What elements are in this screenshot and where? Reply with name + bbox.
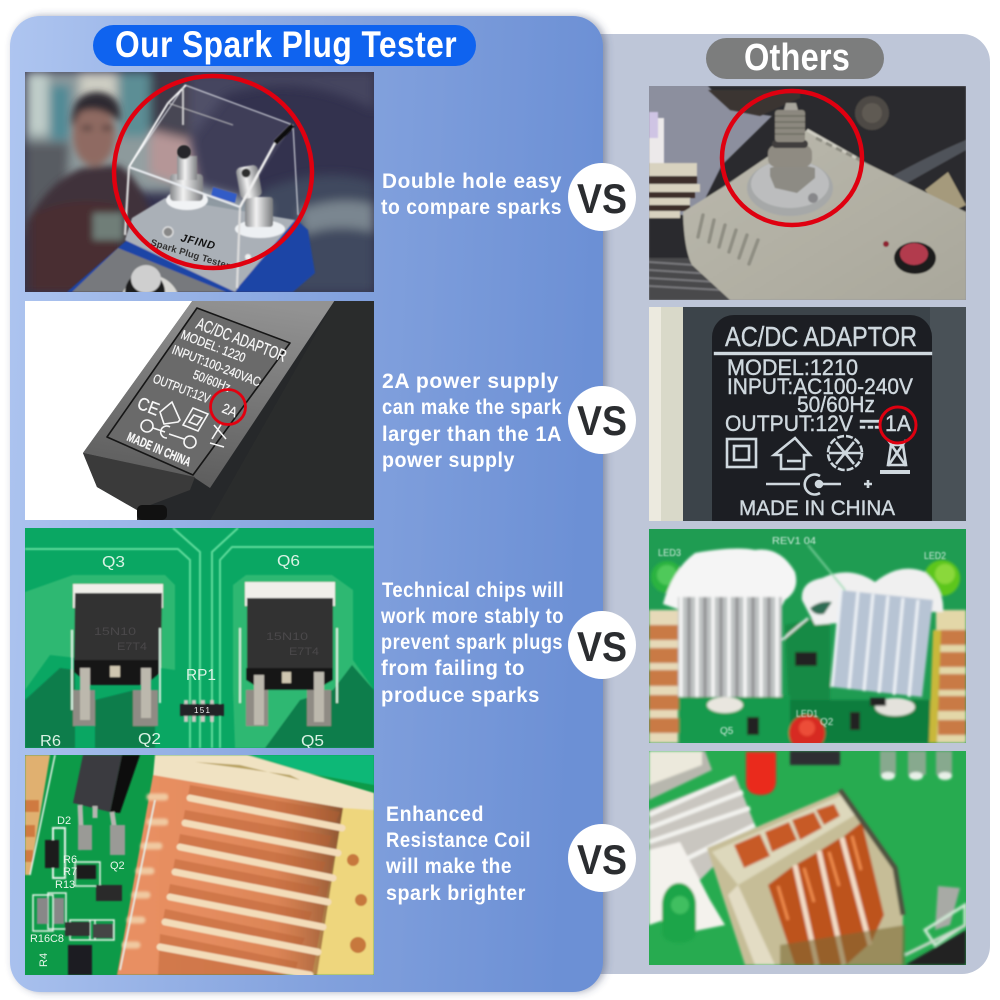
photo: 2A adapter label: AC/DC ADAPTOR [194,314,289,366]
photo: competitor adapter label 1A: AC/DC ADAPTOR [725,321,917,352]
red highlight circle [880,407,916,443]
photo: enhanced resistance coil: Q2 [110,860,125,872]
photo: competitor adapter label 1A: 1A [885,411,911,436]
caption: resistance coil [385,802,531,905]
caption: 2A power supply: can make the spark [382,395,562,419]
red highlight circle [722,91,862,225]
photo: competitor adapter label 1A: OUTPUT:12V [725,411,853,436]
photo: competitor adapter label 1A: MADE IN CHINA [739,497,895,520]
photo: competitor heat sinks: REV1 04 [772,536,816,547]
photo: competitor heat sinks: LED1 [796,709,818,720]
panel: others [560,34,990,974]
photo: 2A adapter label: OUTPUT:12V [151,371,213,406]
photo: 2A adapter label: MADE IN CHINA [125,429,194,469]
caption: resistance coil: Enhanced [386,802,484,826]
caption: double hole: Double hole easy [382,169,562,193]
photo: tester circuit board chips: Q3 [102,554,125,571]
caption: double hole [381,169,562,219]
photo: enhanced resistance coil: R4 [38,953,50,967]
photo: tester circuit board chips: Q6 [277,553,300,570]
photo: tester circuit board chips [25,528,374,750]
photo: tester circuit board chips: R6 [40,733,61,750]
caption: resistance coil: spark brighter [386,881,526,905]
caption: resistance coil: will make the [385,854,512,878]
badge: VS 3 [568,611,636,679]
caption: 2A power supply [382,369,562,472]
caption: double hole: to compare sparks [381,195,562,219]
badge: VS 4 [568,824,636,892]
photo: competitor heat sinks: LED2 [924,551,946,562]
photo: competitor heat sinks: Q2 [820,717,834,728]
caption: 2A power supply: power supply [382,448,515,472]
photo: competitor single-hole tester [649,86,966,300]
caption: technical chips [380,578,564,707]
photo: tester circuit board chips: Q5 [301,733,324,750]
icons: safety marks [141,402,226,448]
photo: enhanced resistance coil [25,755,374,975]
badge: VS 4: VS [577,836,627,883]
photo: double-hole tester with acrylic cover: Spark Plug Tester [149,237,231,272]
caption: resistance coil: Resistance Coil [386,828,531,852]
photo: 2A adapter label: 50/60Hz [191,367,233,395]
photo: tester circuit board chips: 151 [194,706,211,715]
red highlight circle [114,76,312,268]
photo: enhanced resistance coil: R7 [63,866,77,878]
icons: safety marks [727,436,910,495]
photo: double-hole tester with acrylic cover [25,72,374,292]
badge: VS 3: VS [577,623,627,670]
caption: technical chips: prevent spark plugs [381,630,563,654]
panel: our spark plug tester [10,16,603,992]
caption: 2A power supply: 2A power supply [382,369,559,393]
photo: 2A adapter label: 2A [220,400,240,420]
caption: 2A power supply: larger than the 1A [382,422,562,446]
photo: double-hole tester with acrylic cover: JFIND [179,232,216,252]
photo: competitor adapter label 1A: INPUT:AC100-240V [727,374,913,399]
photo: competitor coil [649,751,966,965]
badge: VS 2: VS [577,397,627,444]
badge: VS 1 [568,163,636,231]
photo: tester circuit board chips: E7T4 [289,646,319,658]
photo: enhanced resistance coil: R6 [63,854,77,866]
photo: 2A adapter label: INPUT:100-240VAC [170,342,263,389]
photo: enhanced resistance coil: R16C8 [30,933,64,945]
photo: competitor heat sinks: Q5 [720,726,734,737]
caption: technical chips: produce sparks [381,683,540,707]
photo: competitor heat sinks: LED3 [658,548,681,559]
photo: tester circuit board chips: Q2 [138,731,161,748]
photo: competitor adapter label 1A [649,307,966,541]
title pill: Our Spark Plug Tester [115,24,457,65]
photo: enhanced resistance coil: R13 [55,879,75,891]
caption: technical chips: from failing to [381,656,525,680]
photo: competitor adapter label 1A: MODEL:1210 [727,355,858,380]
photo: enhanced resistance coil: D2 [57,815,71,827]
caption: technical chips: Technical chips will [382,578,564,602]
photo: tester circuit board chips: E7T4 [117,641,147,653]
photo: 2A adapter label [25,300,374,520]
caption: technical chips: work more stably to [380,604,564,628]
photo: tester circuit board chips: 15N10 [94,626,136,638]
photo: 2A adapter label: MODEL: 1220 [179,327,248,365]
photo: 2A adapter label: CE [135,393,162,420]
others heading [706,37,884,79]
others heading: Others [744,37,850,79]
red highlight circle [210,390,246,424]
badge: VS 1: VS [577,175,627,222]
photo: competitor heat sinks [649,529,966,751]
photo: tester circuit board chips: 15N10 [266,631,308,643]
photo: tester circuit board chips: RP1 [186,667,216,684]
photo: competitor adapter label 1A: 50/60Hz [797,392,875,417]
badge: VS 2 [568,386,636,454]
